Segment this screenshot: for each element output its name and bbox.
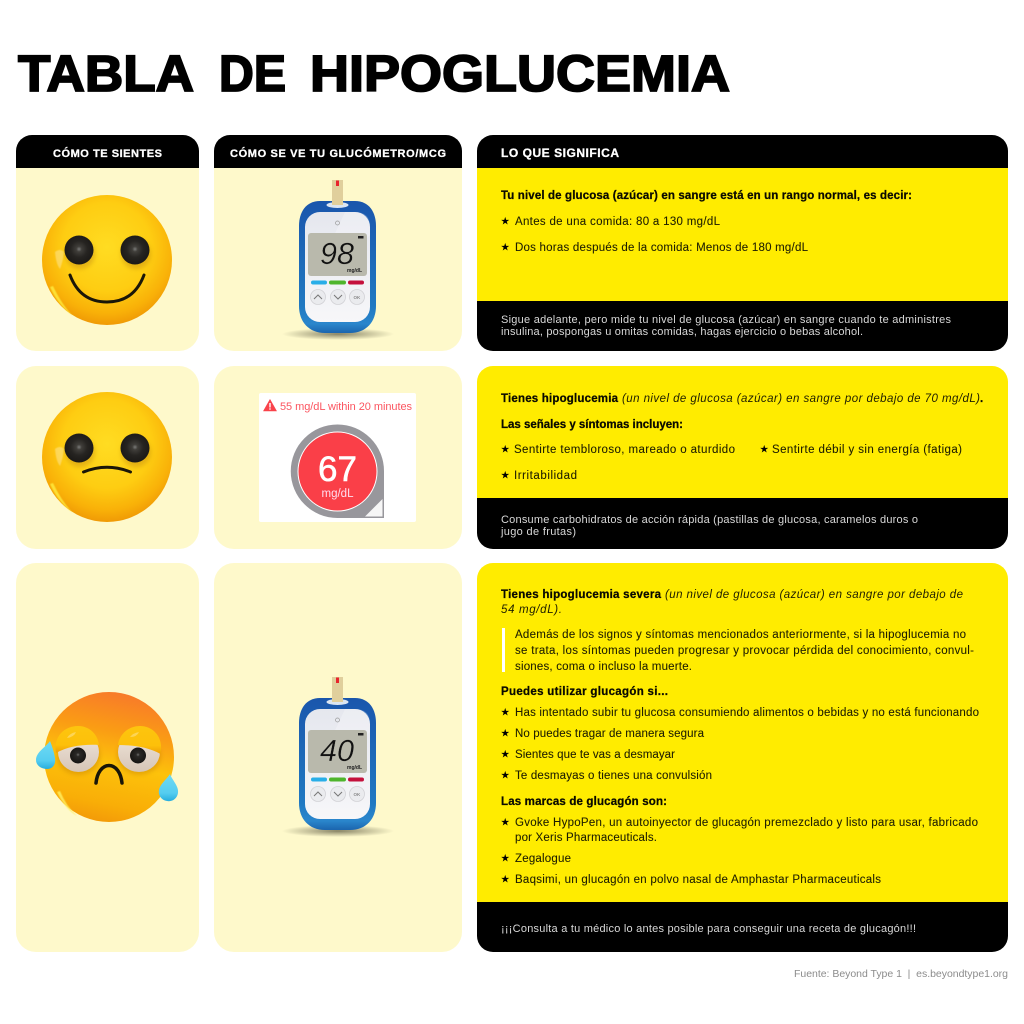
title: HIPOGLUCEMIA [310,45,730,102]
card: CGM reading 67: 55 mg/dL within 20 minutes [280,401,412,413]
card: CGM reading 67: 67 [318,450,357,489]
heading: severe hypoglycemia: 54 mg/dL). [501,604,562,616]
list: glucagon conditions [500,706,979,782]
heading: severe hypoglycemia: (un nivel de glucosa (azúcar) en sangre por debajo de [665,589,963,601]
list: glucagon brands: ★ [500,852,510,864]
advice bar: normal [477,301,1008,351]
title: DE [219,45,286,102]
list: normal ranges: Antes de una comida: 80 a 130 mg/dL [515,216,721,228]
panel: how you feel, normal [16,135,199,351]
callout: severe warning: siones, coma o incluso la muerte. [515,661,692,673]
list: glucagon conditions: ★ [500,728,510,740]
list: symptoms [500,444,962,482]
list: glucagon conditions: ★ [500,770,510,782]
icon: uneasy face [42,392,172,522]
column header: meaning [477,135,1008,168]
heading: severe hypoglycemia: Tienes hipoglucemia severa [501,589,662,601]
list: symptoms: ★ [500,444,510,456]
list: normal ranges [500,216,809,254]
title [18,45,730,102]
column header: meaning: LO QUE SIGNIFICA [501,146,619,160]
icon: smiling face [42,195,172,325]
advice bar: hypoglycemia: Consume carbohidratos de acción rápida (pastillas de glucosa, caramelos duros o [501,514,918,526]
list: symptoms: ★ [760,444,769,456]
panel: how you feel, severe [16,563,199,952]
icon: glucose meter reading 98: 98 [320,236,355,271]
column header: how you feel: CÓMO TE SIENTES [53,147,162,160]
panel: meter, severe [214,563,462,952]
heading: use glucagon if: Puedes utilizar glucagón si... [501,686,668,698]
panel: sensor, hypoglycemia [214,366,462,549]
list: normal ranges: Dos horas después de la comida: Menos de 180 mg/dL [515,242,809,254]
list: glucagon conditions: No puedes tragar de manera segura [515,728,705,740]
list: glucagon brands: Zegalogue [515,853,571,865]
list: glucagon brands: ★ [500,874,510,886]
icon: exhausted sweating face [36,692,178,822]
list: glucagon conditions: Te desmayas o tienes una convulsión [515,770,712,782]
list: symptoms: Sentirte débil y sin energía (fatiga) [772,444,962,456]
advice bar: severe: ¡¡¡Consulta a tu médico lo antes posible para conseguir una receta de glucagón!!! [501,923,916,935]
icon: glucose meter reading 40: OK [354,792,361,797]
advice bar: hypoglycemia [477,498,1008,549]
heading: hypoglycemia: . [980,393,983,405]
list: glucagon conditions: Has intentado subir tu glucosa consumiendo alimentos o bebidas y no está funcionando [515,707,979,719]
card: CGM reading 67 [259,393,416,522]
heading: glucagon brands: Las marcas de glucagón son: [501,796,667,808]
heading: severe hypoglycemia [501,589,963,616]
list: glucagon conditions: ★ [500,706,510,718]
icon: glucose meter reading 98: mg/dL [347,268,362,274]
panel: meaning, severe [477,563,1008,952]
list: normal ranges: ★ [500,216,510,228]
icon: glucose meter reading 98 [282,180,394,340]
callout: severe warning [502,628,974,673]
icon: glucose meter reading 98: OK [354,295,361,300]
column header: meter: CÓMO SE VE TU GLUCÓMETRO/MCG [230,147,446,160]
heading: normal range: Tu nivel de glucosa (azúcar) en sangre está en un rango normal, es decir: [501,190,912,202]
panel: how you feel, hypoglycemia [16,366,199,549]
heading: hypoglycemia: (un nivel de glucosa (azúcar) en sangre por debajo de 70 mg/dL) [622,393,980,405]
list: glucagon brands: Gvoke HypoPen, un autoinyector de glucagón premezclado y listo para usar, fabricado [515,817,978,829]
list: symptoms: ★ [500,470,510,482]
advice bar: hypoglycemia: jugo de frutas) [500,526,576,538]
list: glucagon conditions: ★ [500,748,510,760]
list: normal ranges: ★ [500,242,510,254]
title: TABLA [18,45,194,102]
list: glucagon brands: por Xeris Pharmaceuticals. [515,832,657,844]
list: glucagon conditions: Sientes que te vas a desmayar [515,749,675,761]
icon: warning triangle [264,400,276,411]
panel: meaning, hypoglycemia [477,366,1008,549]
icon: glucose meter reading 40: 40 [320,733,354,768]
heading: hypoglycemia: Tienes hipoglucemia [501,393,619,405]
list: glucagon brands: ★ [500,816,510,828]
advice bar: normal: Sigue adelante, pero mide tu nivel de glucosa (azúcar) en sangre cuando te administres [501,314,952,326]
icon: glucose meter reading 40: mg/dL [347,765,362,771]
heading: signs and symptoms: Las señales y síntomas incluyen: [501,419,683,431]
card: CGM reading 67: mg/dL [322,488,354,500]
advice bar: normal: insulina, pospongas u omitas comidas, hagas ejercicio o bebas alcohol. [501,326,863,338]
column header: how you feel [16,135,199,168]
callout: severe warning: se trata, los síntomas pueden progresar y provocar pérdida del conocimiento, convul- [515,645,974,657]
list: glucagon brands: Baqsimi, un glucagón en polvo nasal de Amphastar Pharmaceuticals [515,874,881,886]
list: glucagon brands [500,816,978,886]
advice bar: severe [477,902,1008,952]
icon: glucose meter reading 40 [282,677,394,837]
source footer: Fuente: Beyond Type 1 | es.beyondtype1.org [794,968,1008,980]
panel: meaning, normal [477,135,1008,351]
list: symptoms: Irritabilidad [514,470,577,482]
callout: severe warning: Además de los signos y síntomas mencionados anteriormente, si la hipoglucemia no [515,629,966,641]
panel: meter, normal [214,135,462,351]
column header: meter [214,135,462,168]
list: symptoms: Sentirte tembloroso, mareado o aturdido [514,444,735,456]
